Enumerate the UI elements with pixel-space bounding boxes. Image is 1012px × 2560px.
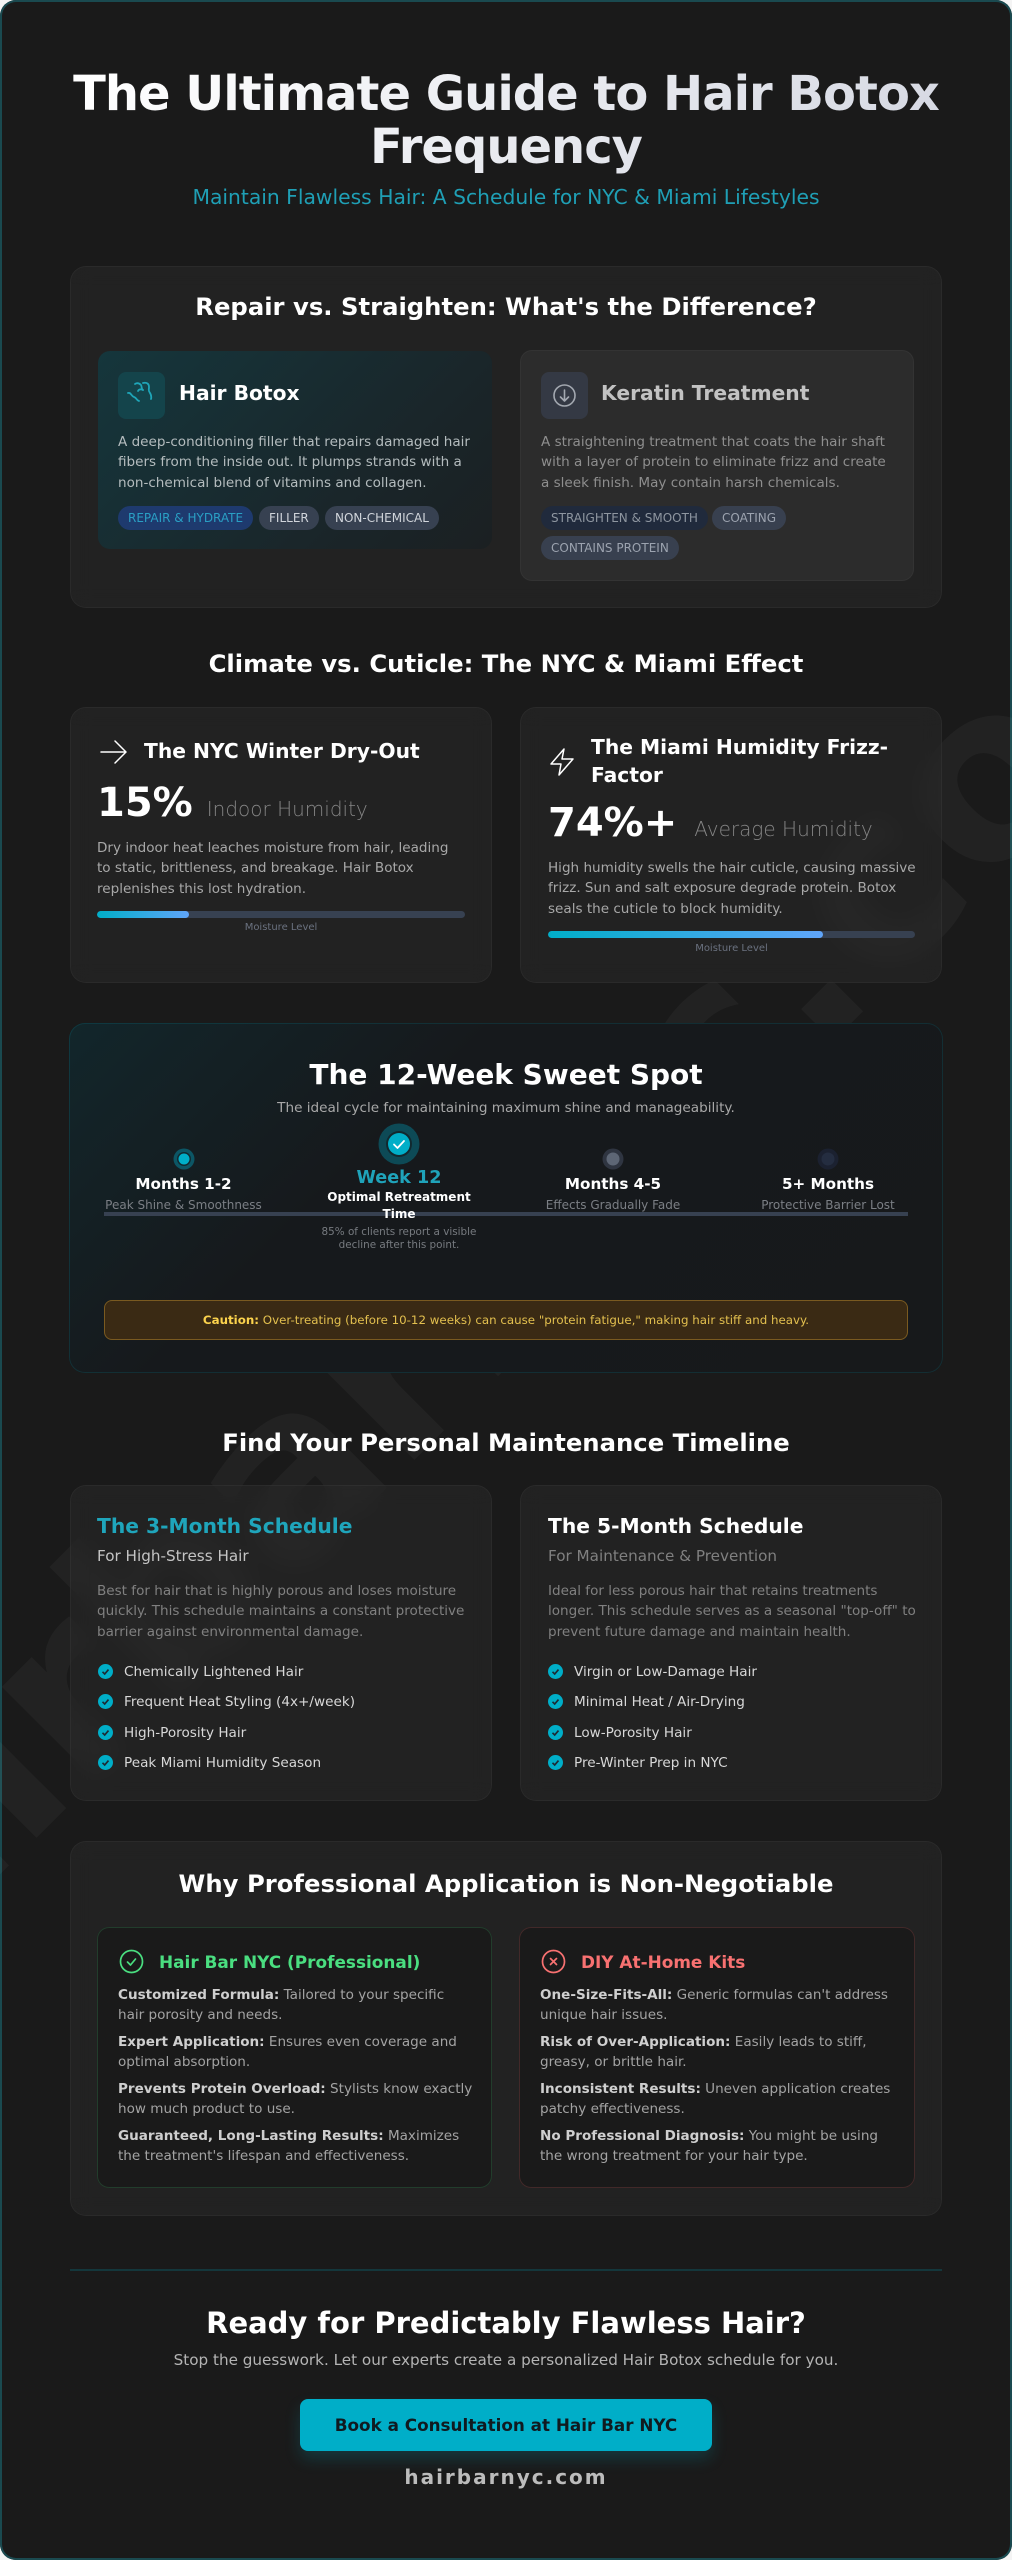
list item: High-Porosity Hair <box>124 1725 246 1741</box>
description <box>97 840 448 897</box>
tags: FILLER <box>269 511 309 525</box>
tags <box>541 506 786 560</box>
timeline node: week 12: Optimal Retreatment <box>327 1190 471 1204</box>
card subtitle: For High-Stress Hair <box>97 1547 249 1565</box>
website: hairbarnyc.com <box>404 2465 608 2489</box>
timeline node: 5+ months <box>761 1148 895 1212</box>
CTA button: Book a Consultation at Hair Bar NYC <box>335 2415 677 2435</box>
subtitle: Maintain Flawless Hair: A Schedule for NYC & Miami Lifestyles <box>192 185 820 209</box>
tags: REPAIR & HYDRATE <box>128 511 243 525</box>
list item: Pre-Winter Prep in NYC <box>574 1755 728 1771</box>
checklist <box>548 1664 757 1771</box>
point <box>118 1987 444 2023</box>
description: A straightening treatment that coats the hair shaft <box>541 434 885 450</box>
description: A deep-conditioning filler that repairs damaged hair <box>118 434 470 450</box>
description <box>541 434 886 491</box>
list item: Minimal Heat / Air-Drying <box>574 1694 745 1710</box>
timeline line <box>104 1212 908 1216</box>
panel: repair vs straighten <box>70 266 942 608</box>
timeline node: months 1-2: Months 1-2 <box>135 1175 232 1193</box>
timeline node: months 4-5: Effects Gradually Fade <box>546 1198 680 1212</box>
description: prevent future damage and maintain health. <box>548 1624 851 1640</box>
point <box>118 2034 457 2070</box>
description: seals the cuticle to block humidity. <box>548 901 783 917</box>
tags: NON-CHEMICAL <box>335 511 429 525</box>
subheading: The ideal cycle for maintaining maximum shine and manageability. <box>277 1100 735 1116</box>
point: No Professional Diagnosis: You might be using <box>540 2128 878 2144</box>
icon: circled down arrow <box>541 372 588 419</box>
heading: climate: Climate vs. Cuticle: The NYC & Miami Effect <box>209 649 803 678</box>
point: One-Size-Fits-All: Generic formulas can't address <box>540 1987 888 2003</box>
icon: lightning bolt <box>550 748 574 776</box>
caution callout <box>104 1300 908 1340</box>
card title: Hair Botox <box>179 381 300 405</box>
panel: Miami humidity <box>520 707 942 983</box>
card title <box>591 735 888 786</box>
point: the treatment's lifespan and effectiveness. <box>118 2148 409 2164</box>
heading: Repair vs. Straighten: What's the Difference? <box>195 292 817 321</box>
card: DIY kits <box>519 1927 915 2188</box>
card title: Keratin Treatment <box>601 381 809 405</box>
title: The Ultimate Guide to Hair Botox <box>73 66 939 122</box>
tags <box>118 506 439 530</box>
description <box>548 860 916 917</box>
benefits list <box>118 1987 472 2164</box>
card: hair botox <box>98 351 492 549</box>
description: replenishes this lost hydration. <box>97 881 306 897</box>
title <box>0 68 1012 174</box>
checklist <box>98 1664 355 1771</box>
point <box>540 1987 888 2023</box>
timeline node: week 12: 85% of clients report a visible <box>322 1226 476 1238</box>
description: with a layer of protein to eliminate frizz and create <box>541 454 886 470</box>
point: how much product to use. <box>118 2101 295 2117</box>
point <box>540 2034 867 2070</box>
point: Expert Application: Ensures even coverage and <box>118 2034 457 2050</box>
moisture bar <box>97 911 465 918</box>
panel: professional application <box>70 1841 942 2216</box>
timeline node: months 1-2 <box>105 1148 262 1212</box>
tags: STRAIGHTEN & SMOOTH <box>551 511 698 525</box>
card: keratin treatment <box>520 350 914 581</box>
point <box>540 2081 890 2117</box>
description <box>118 434 470 491</box>
list item: Peak Miami Humidity Season <box>124 1755 321 1771</box>
bar label: Moisture Level <box>245 922 317 933</box>
panel: 3-month schedule <box>70 1485 492 1801</box>
timeline node: months 4-5: Months 4-5 <box>565 1175 661 1193</box>
description: Dry indoor heat leaches moisture from hair, leading <box>97 840 448 856</box>
icon: hair strands <box>118 372 165 419</box>
description: High humidity swells the hair cuticle, causing massive <box>548 860 916 876</box>
heading: maintenance timeline: Find Your Personal Maintenance Timeline <box>222 1428 790 1457</box>
card title: Factor <box>591 762 663 786</box>
description: Best for hair that is highly porous and loses moisture <box>97 1583 456 1599</box>
stat: 15% Indoor Humidity <box>97 780 368 826</box>
title: Frequency <box>370 119 642 175</box>
card title: The Miami Humidity Frizz- <box>591 735 888 759</box>
description <box>97 1583 464 1640</box>
caution callout: Caution: Over-treating (before 10-12 weeks) can cause "protein fatigue," making hair stiff and heavy. <box>203 1313 809 1327</box>
panel: 12-week sweet spot <box>69 1023 943 1373</box>
timeline node: week 12 <box>322 1124 476 1251</box>
card: hair bar NYC <box>97 1927 492 2188</box>
point: optimal absorption. <box>118 2054 250 2070</box>
tags: CONTAINS PROTEIN <box>551 541 669 555</box>
description <box>548 1583 916 1640</box>
point: Inconsistent Results: Uneven application creates <box>540 2081 890 2097</box>
point: Customized Formula: Tailored to your specific <box>118 1987 444 2003</box>
card title: DIY At-Home Kits <box>581 1952 745 1972</box>
tags: COATING <box>722 511 776 525</box>
card title: The 3-Month Schedule <box>97 1514 352 1538</box>
timeline node: week 12: Week 12 <box>357 1168 441 1188</box>
description: non-chemical blend of vitamins and collagen. <box>118 475 427 491</box>
list item: Low-Porosity Hair <box>574 1725 692 1741</box>
point: hair porosity and needs. <box>118 2007 282 2023</box>
card title: The 5-Month Schedule <box>548 1514 803 1538</box>
panel: NYC winter <box>70 707 492 983</box>
point <box>540 2128 878 2164</box>
point: patchy effectiveness. <box>540 2101 685 2117</box>
description: quickly. This schedule maintains a constant protective <box>97 1603 464 1619</box>
drawbacks list <box>540 1987 890 2164</box>
heading: The 12-Week Sweet Spot <box>309 1058 703 1091</box>
timeline node: 5+ months: 5+ Months <box>782 1175 874 1193</box>
point <box>118 2128 459 2164</box>
timeline node: 5+ months: Protective Barrier Lost <box>761 1198 895 1212</box>
icon: cross circle <box>542 1950 566 1974</box>
timeline node: months 4-5 <box>546 1148 680 1212</box>
point: greasy, or brittle hair. <box>540 2054 687 2070</box>
description: longer. This schedule serves as a seasonal "top-off" to <box>548 1603 916 1619</box>
panel: 5-month schedule <box>520 1485 942 1801</box>
point: Risk of Over-Application: Easily leads to stiff, <box>540 2034 867 2050</box>
card title: The NYC Winter Dry-Out <box>144 739 420 763</box>
point <box>118 2081 472 2117</box>
card subtitle: For Maintenance & Prevention <box>548 1547 777 1565</box>
timeline node: months 1-2: Peak Shine & Smoothness <box>105 1198 262 1212</box>
list item: Frequent Heat Styling (4x+/week) <box>124 1694 355 1710</box>
stat: 74%+ Average Humidity <box>548 800 873 846</box>
icon: arrow <box>100 740 127 764</box>
point: Prevents Protein Overload: Stylists know exactly <box>118 2081 472 2097</box>
heading: Why Professional Application is Non-Negotiable <box>179 1869 833 1898</box>
CTA text: Stop the guesswork. Let our experts create a personalized Hair Botox schedule for you. <box>174 2351 838 2369</box>
icon: check circle <box>120 1950 144 1974</box>
list item: Virgin or Low-Damage Hair <box>574 1664 757 1680</box>
list item: Chemically Lightened Hair <box>124 1664 303 1680</box>
point: Guaranteed, Long-Lasting Results: Maximizes <box>118 2128 459 2144</box>
description: barrier against environmental damage. <box>97 1624 363 1640</box>
point: unique hair issues. <box>540 2007 667 2023</box>
moisture bar <box>548 931 915 938</box>
timeline node: week 12: decline after this point. <box>339 1239 459 1251</box>
card title: Hair Bar NYC (Professional) <box>159 1952 420 1972</box>
point: the wrong treatment for your hair type. <box>540 2148 808 2164</box>
CTA heading: Ready for Predictably Flawless Hair? <box>206 2306 806 2340</box>
description: fibers from the inside out. It plumps strands with a <box>118 454 462 470</box>
CTA button <box>300 2399 712 2451</box>
description: a sleek finish. May contain harsh chemicals. <box>541 475 840 491</box>
description: Ideal for less porous hair that retains treatments <box>548 1583 877 1599</box>
description: to static, brittleness, and breakage. Hair Botox <box>97 860 414 876</box>
timeline node: week 12: Time <box>383 1207 415 1221</box>
bar label: Moisture Level <box>695 943 768 954</box>
description: frizz. Sun and salt exposure degrade protein. Botox <box>548 880 896 896</box>
